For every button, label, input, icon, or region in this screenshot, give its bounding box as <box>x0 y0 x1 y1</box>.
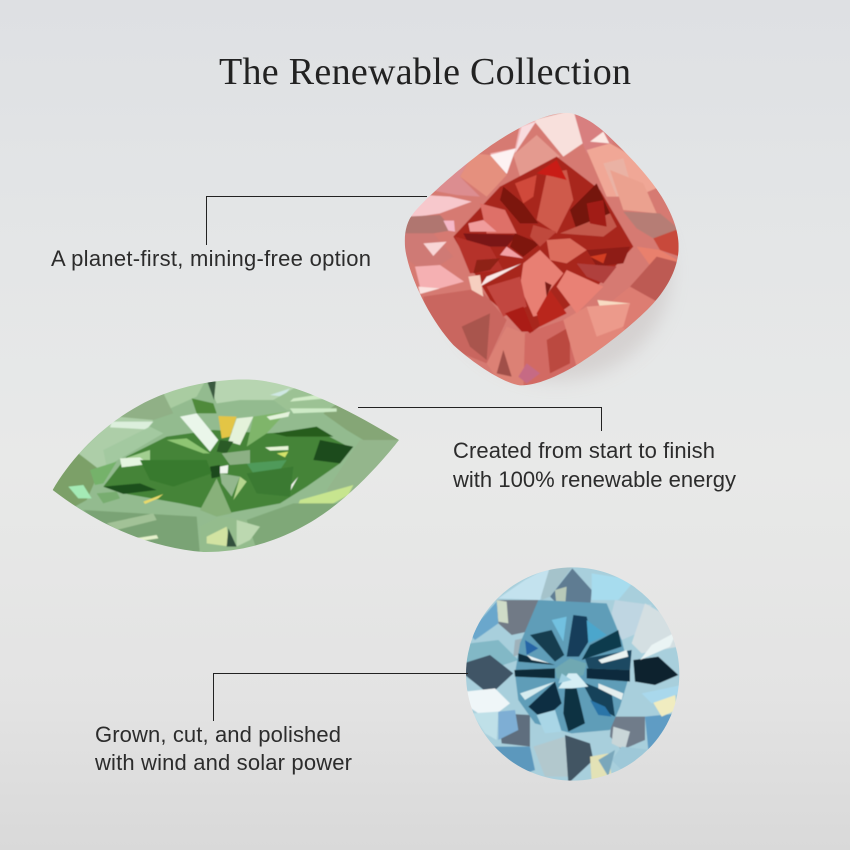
leader line: planet-first <box>206 196 427 245</box>
callout text: wind and solar: with wind and solar power <box>94 750 352 775</box>
gem: green marquise diamond <box>52 380 399 552</box>
callout text: renewable energy: Created from start to finish <box>453 438 715 463</box>
callout: renewable energy <box>358 408 736 492</box>
callout: wind and solar <box>94 674 468 775</box>
callout text: planet-first: A planet-first, mining-free option <box>51 246 371 271</box>
callout text: wind and solar: Grown, cut, and polished <box>95 722 341 747</box>
title: The Renewable Collection <box>219 51 631 93</box>
leader line: wind and solar <box>214 674 468 721</box>
callout text: renewable energy <box>452 438 736 492</box>
callout text: renewable energy: with 100% renewable energy <box>452 467 736 492</box>
gem: blue round diamond <box>466 567 680 781</box>
callout text: wind and solar <box>94 722 352 775</box>
callout: planet-first <box>51 196 427 271</box>
leader line: renewable energy <box>358 408 602 431</box>
gem: red cushion diamond <box>404 113 679 386</box>
